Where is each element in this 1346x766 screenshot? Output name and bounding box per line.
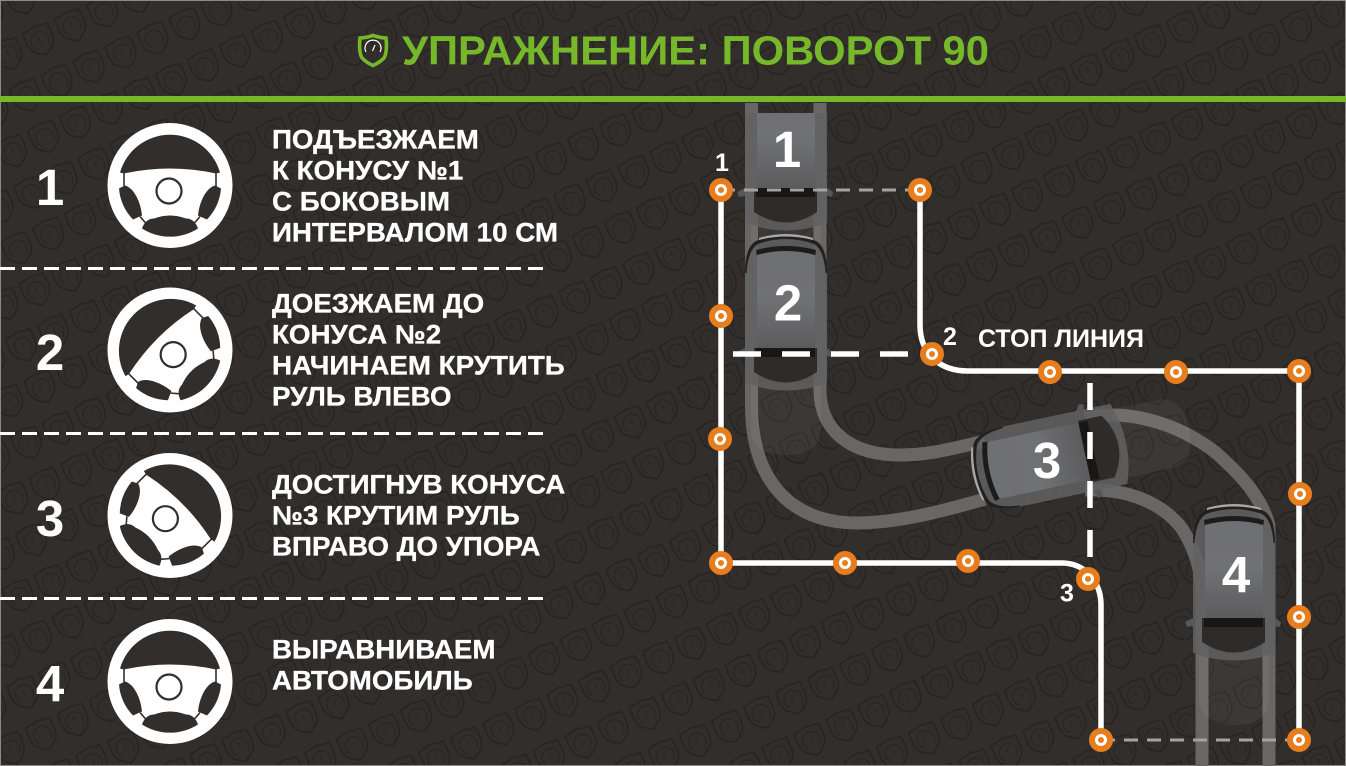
cone centres [717, 187, 1303, 743]
wheel tracks [752, 103, 1269, 766]
car numbers: 4 [1222, 546, 1251, 603]
car numbers: 3 [1033, 432, 1061, 489]
step 1 text: ИНТЕРВАЛОМ 10 СМ [272, 217, 558, 247]
step 1 text: ПОДЪЕЗЖАЕМ [272, 124, 479, 154]
step number 1: 1 [36, 159, 64, 216]
step 2 [36, 262, 572, 438]
step 1 text: С БОКОВЫМ [272, 186, 450, 216]
step 3 text: ВПРАВО ДО УПОРА [272, 531, 540, 561]
car numbers [773, 121, 1251, 603]
icon: steering wheel straight [108, 619, 232, 744]
boundary lines [721, 190, 1299, 740]
step number 3: 3 [36, 490, 64, 547]
step 4 [36, 619, 503, 744]
cones [711, 181, 1309, 749]
car 3 [963, 383, 1199, 523]
car numbers: 2 [774, 274, 802, 332]
cone labels: 3 [1060, 580, 1074, 608]
cone labels: 2 [943, 323, 957, 351]
car 4 [1185, 504, 1281, 725]
step number 2: 2 [36, 324, 64, 381]
step number 4: 4 [36, 655, 65, 712]
stop line label: СТОП ЛИНИЯ [978, 325, 1144, 353]
step 3 [36, 427, 573, 604]
car 2 [737, 234, 833, 455]
icon: shield with speedometer [360, 36, 386, 66]
step 2 text: РУЛЬ ВЛЕВО [272, 381, 452, 411]
step 4 text: АВТОМОБИЛЬ [272, 665, 473, 695]
stop lines [721, 190, 1299, 740]
step 2 text: НАЧИНАЕМ КРУТИТЬ [272, 350, 565, 380]
heading text: УПРАЖНЕНИЕ: ПОВОРОТ 90 [402, 28, 989, 74]
car 1 [737, 113, 833, 240]
step 2 text: КОНУСА №2 [272, 319, 441, 349]
cone labels [715, 149, 1074, 608]
icon: steering wheel straight [108, 123, 232, 248]
step 3 text: №3 КРУТИМ РУЛЬ [272, 500, 520, 530]
step 4 text: ВЫРАВНИВАЕМ [272, 634, 495, 664]
step 3 text: ДОСТИГНУВ КОНУСА [272, 469, 565, 499]
title rule [0, 96, 1346, 102]
step 1 [36, 123, 558, 248]
step 2 text: ДОЕЗЖАЕМ ДО [272, 288, 484, 318]
icon: steering wheel turned left [82, 262, 258, 438]
step 1 text: К КОНУСУ №1 [272, 155, 463, 185]
car numbers: 1 [773, 121, 801, 178]
cone labels: 1 [715, 149, 729, 177]
title [360, 28, 989, 74]
diagram: driving course [711, 74, 1309, 766]
icon: steering wheel turned right [82, 427, 258, 604]
